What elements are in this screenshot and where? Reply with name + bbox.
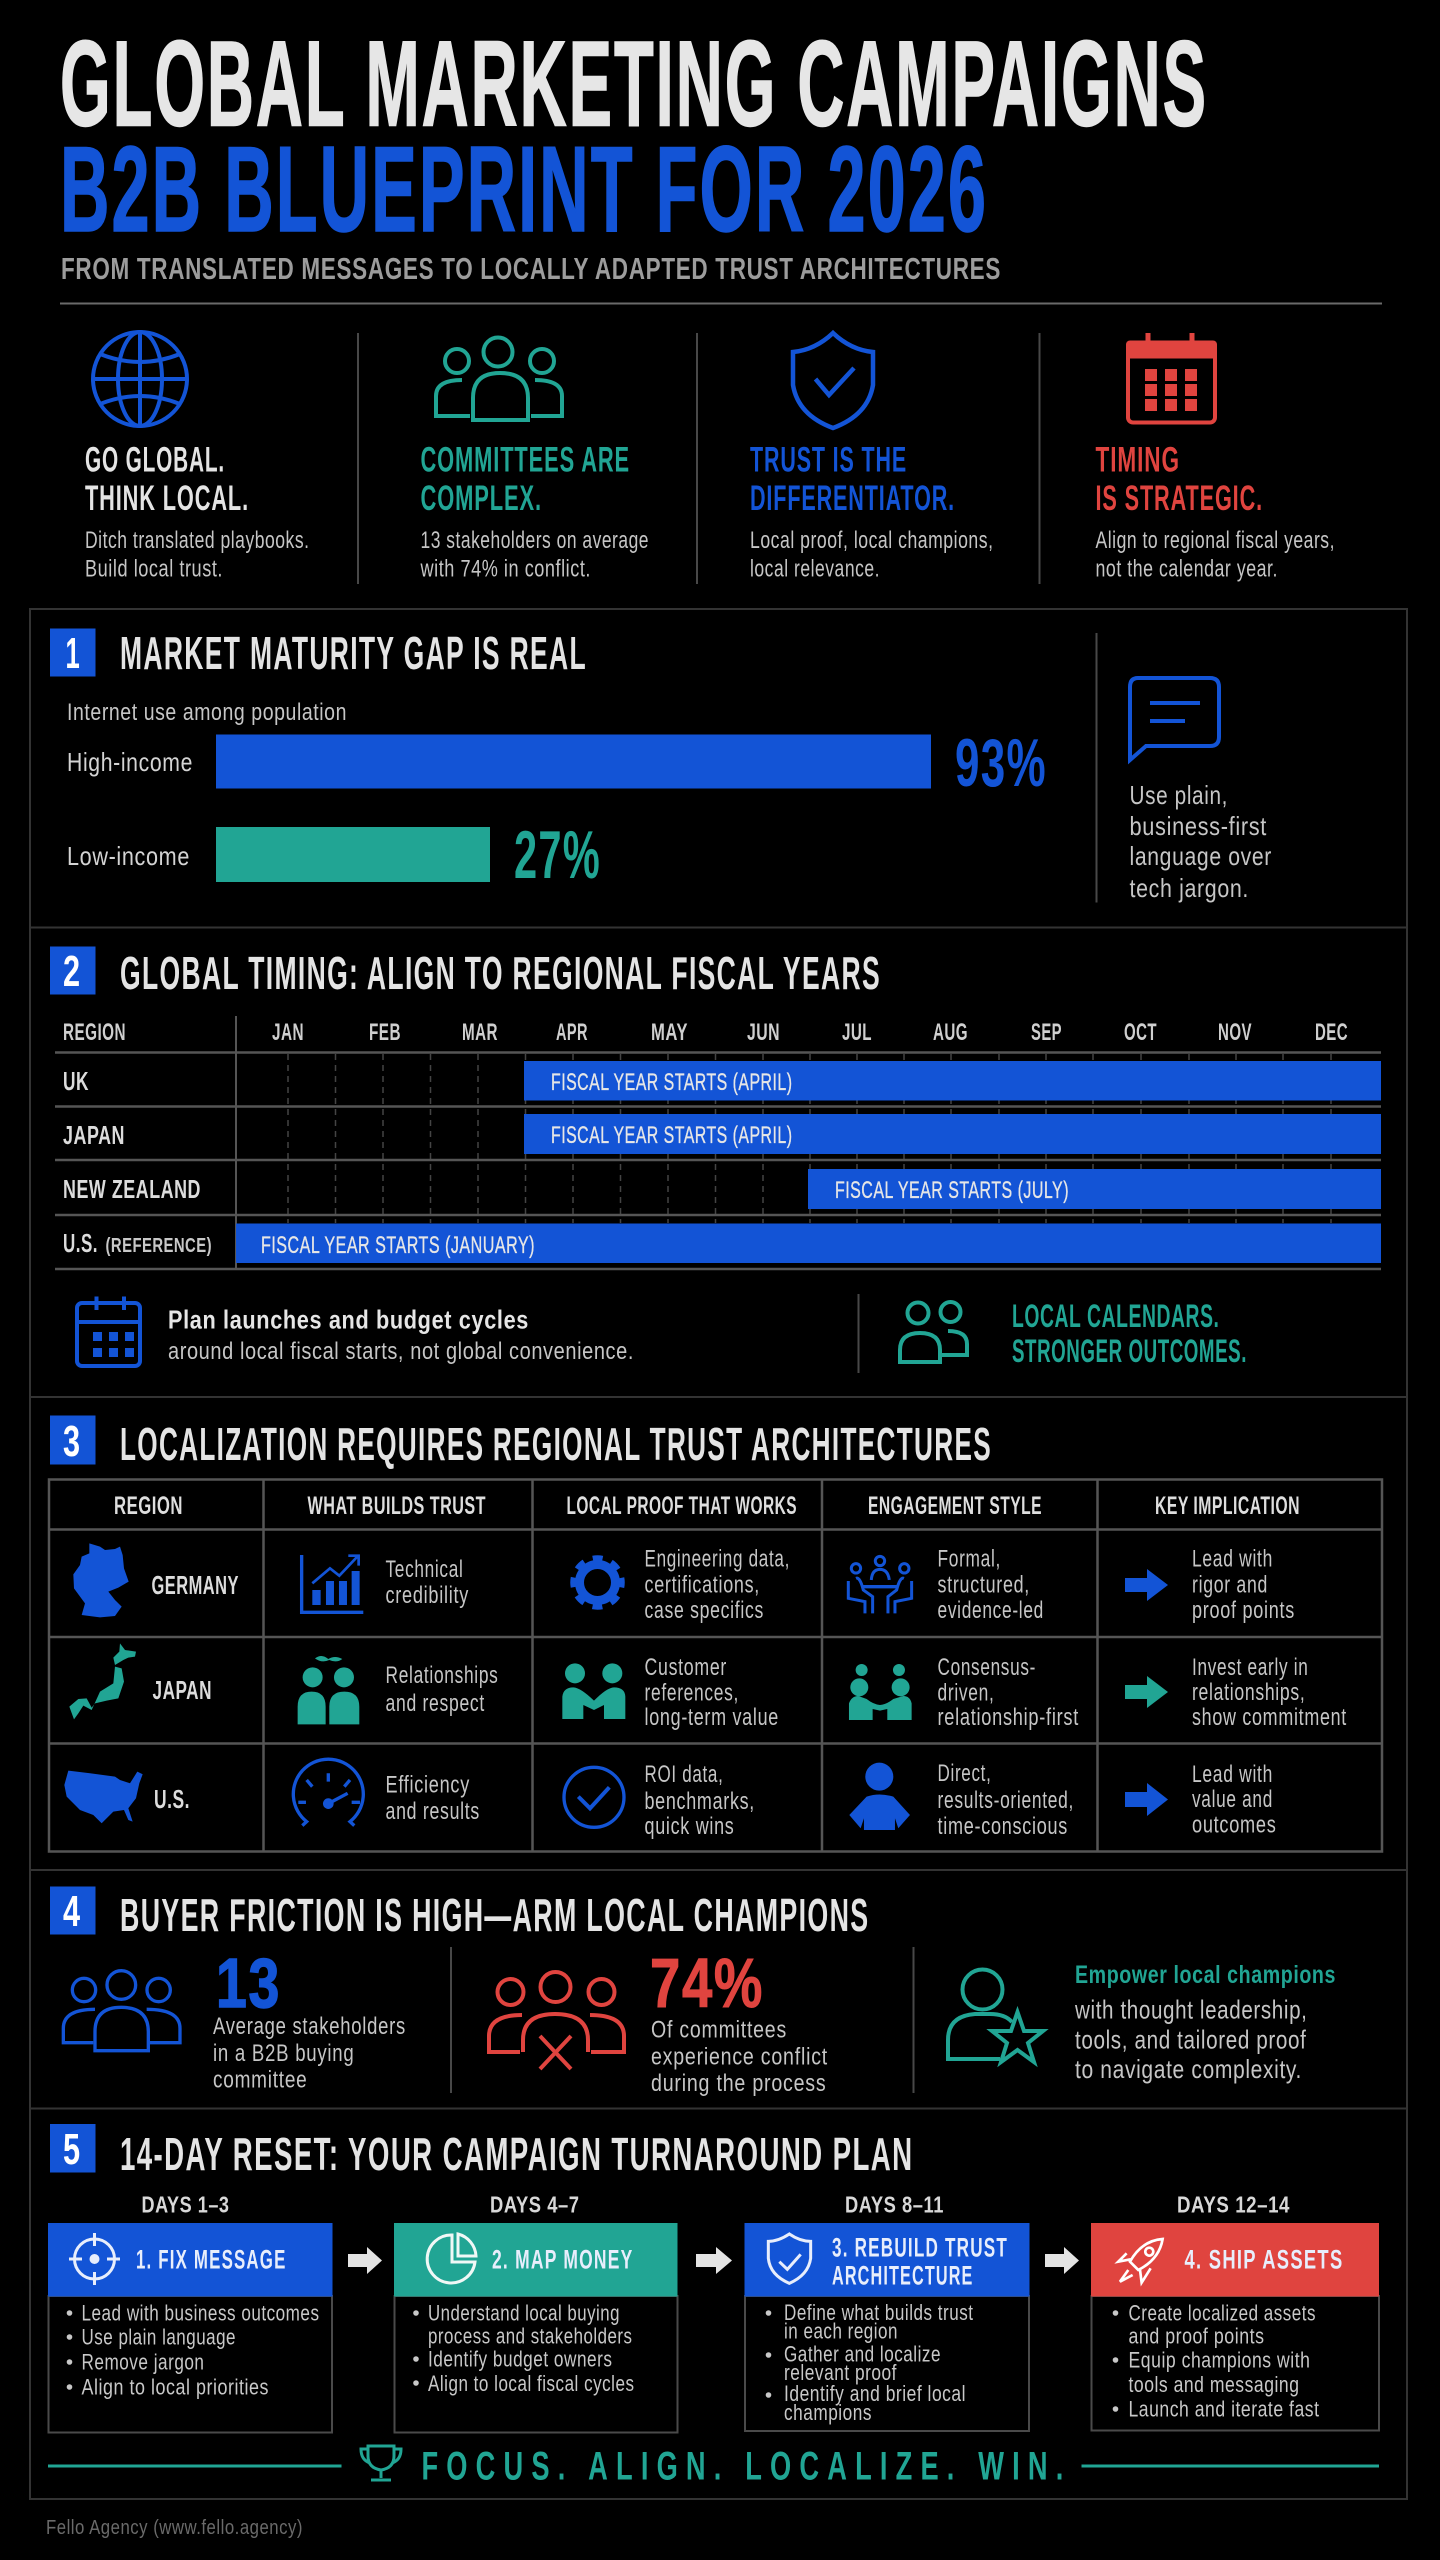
arrow	[1125, 1676, 1168, 1708]
panel: timing	[1096, 333, 1335, 582]
bullet list: and proof points	[1128, 2324, 1264, 2348]
bullet list	[67, 2300, 320, 2400]
section badge 2: 2	[63, 947, 81, 996]
bullet list: process and stakeholders	[428, 2324, 632, 2348]
row: U.S.: ROI data,	[644, 1761, 724, 1788]
row: Japan	[69, 1643, 1347, 1731]
stat: 13 stakeholders: in a B2B buying	[213, 2040, 354, 2067]
callout: plain language: language over	[1130, 841, 1272, 871]
panel: committees: COMPLEX.	[420, 479, 542, 518]
row: U.S.: time-conscious	[938, 1813, 1068, 1840]
panel: trust: local relevance.	[750, 556, 880, 582]
row: U.S.: Direct,	[938, 1760, 992, 1787]
icon: shield	[793, 333, 873, 428]
panel: timing: Align to regional fiscal years,	[1096, 527, 1335, 554]
callout: plain language: tech jargon.	[1130, 873, 1249, 903]
step 4: ship assets	[1091, 2192, 1379, 2430]
row: Germany: Formal,	[938, 1546, 1001, 1572]
bar chart: internet use: 27%	[514, 817, 601, 893]
section badge 4	[50, 1886, 96, 1936]
icon: committee conflict	[489, 1972, 624, 2069]
row: U.S.: Lead with	[1192, 1761, 1273, 1788]
panel: go global: Ditch translated playbooks.	[85, 527, 310, 554]
month header: APR	[556, 1019, 588, 1046]
row: Germany: case specifics	[644, 1597, 764, 1624]
month header: JUL	[842, 1019, 872, 1046]
icon: trophy	[361, 2446, 401, 2480]
text: plan launches: around local fiscal starts, not global convenience.	[168, 1338, 634, 1365]
subtitle: FROM TRANSLATED MESSAGES TO LOCALLY ADAPTED TRUST ARCHITECTURES	[61, 251, 1001, 286]
bullet list: Equip champions with	[1128, 2348, 1310, 2372]
row: Germany: certifications,	[644, 1572, 760, 1598]
bullet list: champions	[784, 2400, 872, 2425]
bullet list	[1113, 2300, 1320, 2422]
icon: calendar	[1126, 333, 1217, 422]
arrow	[1125, 1783, 1168, 1816]
month header: JUN	[747, 1019, 780, 1046]
row UK: UK	[63, 1066, 89, 1096]
row: Germany: GERMANY	[152, 1570, 239, 1600]
section badge 3	[50, 1416, 96, 1466]
row: U.S.: benchmarks,	[644, 1788, 755, 1815]
row UK	[63, 1061, 1381, 1100]
table header: ENGAGEMENT STYLE	[868, 1492, 1042, 1520]
row: Japan: Relationships	[386, 1662, 498, 1689]
title block	[60, 16, 1208, 257]
section badge 2	[50, 946, 96, 996]
step 3: rebuild trust	[744, 2192, 1030, 2431]
step 3: rebuild trust: ARCHITECTURE	[832, 2260, 974, 2290]
month header: AUG	[933, 1019, 968, 1046]
closing banner: FOCUS. ALIGN. LOCALIZE. WIN.	[422, 2444, 1072, 2488]
icon: committee	[436, 338, 562, 420]
heading: GLOBAL TIMING: ALIGN TO REGIONAL FISCAL YEARS	[120, 947, 881, 999]
row: U.S.: results-oriented,	[938, 1787, 1074, 1814]
icon: rocket	[1118, 2239, 1163, 2283]
icon: relationships	[298, 1656, 359, 1724]
bar chart: internet use: Internet use among population	[67, 699, 347, 726]
icon: bar chart	[302, 1555, 363, 1612]
panel: go global	[85, 332, 310, 582]
row: Germany: rigor and	[1192, 1572, 1268, 1598]
step 1: fix message: DAYS 1–3	[142, 2192, 230, 2218]
timeline chart	[55, 1016, 1381, 1269]
panel: go global: GO GLOBAL.	[85, 440, 225, 480]
row: Japan: and respect	[386, 1690, 485, 1717]
icon: speech bubble	[1130, 678, 1219, 760]
callout: local champions	[948, 1961, 1336, 2084]
panel: committees: COMMITTEES ARE	[420, 440, 630, 480]
panel: timing: not the calendar year.	[1096, 556, 1278, 582]
stat: 74% conflict: experience conflict	[651, 2044, 828, 2070]
row: Germany	[73, 1543, 1295, 1624]
bullet list: Gather and localize	[784, 2342, 941, 2366]
row: Japan: driven,	[938, 1680, 994, 1706]
stat: 74% conflict: Of committees	[651, 2016, 787, 2044]
row UK: FISCAL YEAR STARTS (APRIL)	[551, 1069, 792, 1096]
bullet list: Align to local fiscal cycles	[428, 2371, 634, 2396]
row: Japan: Consensus-	[938, 1654, 1036, 1681]
stat: 74% conflict: during the process	[651, 2070, 826, 2097]
stat: 74% conflict	[489, 1944, 828, 2097]
icon: target	[69, 2233, 120, 2285]
row U.S.	[63, 1224, 1381, 1263]
table header	[114, 1492, 1300, 1520]
bullet list	[766, 2300, 974, 2425]
bullet list: Remove jargon	[82, 2350, 204, 2374]
row: Japan: references,	[644, 1680, 739, 1706]
heading: MARKET MATURITY GAP IS REAL	[120, 627, 587, 679]
section badge 1: 1	[66, 629, 80, 678]
bullet list	[413, 2300, 634, 2396]
row: Germany: proof points	[1192, 1597, 1295, 1624]
section badge 4: 4	[63, 1887, 81, 1936]
icon: US map	[64, 1771, 143, 1823]
panel: trust	[750, 333, 994, 582]
row New Zealand	[63, 1169, 1381, 1209]
section badge 1	[50, 628, 96, 678]
panel: section 5 14-day reset	[48, 2124, 1379, 2488]
row: Japan: show commitment	[1192, 1704, 1347, 1731]
table header: KEY IMPLICATION	[1155, 1492, 1300, 1520]
text: local calendars	[1012, 1298, 1247, 1369]
row: U.S.: U.S.	[154, 1784, 190, 1814]
arrow	[1045, 2247, 1079, 2274]
icon: shield check	[768, 2234, 811, 2283]
panel: committees	[420, 338, 649, 582]
row: Germany: Technical	[386, 1556, 464, 1583]
callout: local champions: tools, and tailored proof	[1075, 2024, 1306, 2054]
panel: trust: TRUST IS THE	[750, 440, 907, 480]
step 1: fix message: 1. FIX MESSAGE	[136, 2244, 286, 2274]
step 3: rebuild trust: 3. REBUILD TRUST	[832, 2232, 1008, 2262]
row: U.S.	[64, 1759, 1276, 1840]
panel: section 1 market maturity	[50, 627, 1272, 903]
bar chart: internet use: Low-income	[67, 841, 190, 871]
bullet list: Identify budget owners	[428, 2346, 612, 2372]
icon: committee	[63, 1971, 180, 2051]
row New Zealand: FISCAL YEAR STARTS (JULY)	[835, 1177, 1069, 1204]
bullet list: Create localized assets	[1128, 2300, 1316, 2326]
month header: JAN	[272, 1019, 304, 1046]
bullet list: Identify and brief local	[784, 2381, 966, 2406]
step 2: map money: 2. MAP MONEY	[492, 2244, 634, 2274]
panel: timing: TIMING	[1096, 440, 1180, 480]
section badge 3: 3	[63, 1417, 81, 1466]
table header: WHAT BUILDS TRUST	[308, 1492, 486, 1520]
text: plan launches: Plan launches and budget cycles	[168, 1304, 529, 1334]
month header: SEP	[1031, 1019, 1062, 1046]
icon: Germany map	[73, 1543, 129, 1617]
row: Japan: long-term value	[644, 1704, 779, 1731]
panel: timing: IS STRATEGIC.	[1096, 479, 1263, 518]
callout: plain language	[1130, 780, 1272, 903]
stat: 13 stakeholders: committee	[213, 2066, 308, 2094]
step 2: map money	[394, 2192, 678, 2432]
table header: LOCAL PROOF THAT WORKS	[566, 1492, 797, 1520]
row: Germany: Lead with	[1192, 1546, 1273, 1572]
panel: trust: DIFFERENTIATOR.	[750, 479, 955, 518]
section badge 5: 5	[63, 2125, 81, 2174]
icon: gauge	[293, 1759, 363, 1826]
row: U.S.: Efficiency	[386, 1772, 470, 1798]
table: trust architectures	[49, 1480, 1382, 1852]
icon: meeting	[848, 1556, 912, 1613]
step 1: fix message	[48, 2192, 332, 2432]
panel: trust: Local proof, local champions,	[750, 527, 994, 554]
icon: person	[849, 1763, 910, 1830]
bullet list: tools and messaging	[1128, 2372, 1300, 2397]
bullet list: Align to local priorities	[82, 2374, 269, 2400]
row U.S.: (REFERENCE)	[106, 1235, 212, 1257]
stat: 13 stakeholders	[63, 1944, 406, 2094]
month header: MAR	[462, 1019, 498, 1046]
bullet list: Lead with business outcomes	[82, 2300, 320, 2326]
row: U.S.: quick wins	[644, 1813, 734, 1840]
icon: gear	[574, 1559, 621, 1606]
step 4: ship assets: DAYS 12–14	[1177, 2192, 1290, 2218]
icon: handshake	[562, 1663, 625, 1719]
row: U.S.: and results	[386, 1798, 480, 1825]
row: Japan: JAPAN	[152, 1675, 212, 1705]
panel: committees: 13 stakeholders on average	[420, 527, 649, 554]
bar chart: internet use	[67, 699, 1047, 893]
arrow	[348, 2247, 382, 2274]
stat: 13 stakeholders: Average stakeholders	[213, 2013, 406, 2040]
panel: committees: with 74% in conflict.	[420, 556, 591, 582]
text: local calendars: LOCAL CALENDARS.	[1012, 1298, 1220, 1334]
bar chart: internet use: 93%	[955, 725, 1047, 801]
arrow	[1125, 1569, 1168, 1601]
row Japan: FISCAL YEAR STARTS (APRIL)	[551, 1122, 792, 1149]
bullet list: Define what builds trust	[784, 2300, 974, 2325]
heading: BUYER FRICTION IS HIGH—ARM LOCAL CHAMPIONS	[120, 1889, 870, 1941]
month header: OCT	[1124, 1019, 1157, 1046]
month header	[63, 1019, 1348, 1046]
icon: two people	[900, 1302, 967, 1362]
stat: 13 stakeholders: 13	[216, 1944, 281, 2022]
icon: consensus	[849, 1664, 912, 1720]
table header: REGION	[114, 1492, 183, 1520]
text: local calendars: STRONGER OUTCOMES.	[1012, 1333, 1247, 1369]
callout: plain language: Use plain,	[1130, 780, 1228, 810]
icon: blue calendar	[77, 1296, 140, 1366]
callout: local champions: with thought leadership,	[1074, 1994, 1308, 2024]
row Japan	[63, 1114, 1381, 1154]
panel: go global: THINK LOCAL.	[85, 479, 249, 518]
month header: REGION	[63, 1019, 126, 1046]
icon: Japan map	[69, 1643, 136, 1719]
heading: 14-DAY RESET: YOUR CAMPAIGN TURNAROUND PLAN	[120, 2128, 914, 2180]
panel: go global: Build local trust.	[85, 556, 223, 582]
step 4: ship assets: 4. SHIP ASSETS	[1184, 2244, 1344, 2274]
row: Germany: credibility	[386, 1582, 469, 1609]
bullet list: Understand local buying	[428, 2300, 620, 2326]
row: Japan: relationships,	[1192, 1679, 1306, 1706]
icon: person with star	[948, 1970, 1043, 2062]
row: Germany: Engineering data,	[644, 1546, 790, 1572]
callout: plain language: business-first	[1130, 811, 1267, 841]
bullet list: in each region	[784, 2318, 898, 2344]
row U.S.: FISCAL YEAR STARTS (JANUARY)	[261, 1232, 535, 1259]
row: Germany: structured,	[938, 1572, 1030, 1598]
row New Zealand: NEW ZEALAND	[63, 1174, 201, 1204]
footer source: Fello Agency (www.fello.agency)	[46, 2517, 303, 2539]
panel: section 2 global timing	[50, 946, 1381, 1373]
panel: section 4 buyer friction	[50, 1886, 1336, 2097]
row: U.S.: outcomes	[1192, 1812, 1276, 1838]
row: U.S.: value and	[1192, 1786, 1273, 1813]
row: Japan: Invest early in	[1192, 1654, 1308, 1681]
icon: pie chart	[427, 2234, 476, 2283]
text: plan launches	[168, 1304, 634, 1365]
month header: FEB	[369, 1019, 401, 1046]
bullet list: Launch and iterate fast	[1128, 2396, 1320, 2422]
month header: DEC	[1315, 1019, 1348, 1046]
panel: section 3 localization	[49, 1416, 1382, 1852]
month header: MAY	[651, 1019, 688, 1046]
row Japan: JAPAN	[63, 1120, 125, 1150]
row: Germany: evidence-led	[938, 1597, 1044, 1624]
row: Japan: relationship-first	[938, 1704, 1079, 1731]
month header: NOV	[1218, 1019, 1252, 1046]
stat: 74% conflict: 74%	[650, 1944, 764, 2022]
bullet list: Use plain language	[82, 2324, 236, 2350]
row: Japan: Customer	[644, 1654, 727, 1681]
step 2: map money: DAYS 4–7	[490, 2192, 580, 2218]
bar chart: internet use: High-income	[67, 747, 193, 777]
icon: globe	[93, 332, 187, 426]
bullet list: relevant proof	[784, 2360, 897, 2385]
callout: local champions: to navigate complexity.	[1075, 2054, 1302, 2084]
step 3: rebuild trust: DAYS 8–11	[845, 2192, 944, 2218]
row U.S.: U.S.	[63, 1228, 98, 1258]
section badge 5	[50, 2124, 96, 2174]
arrow	[696, 2247, 732, 2274]
callout: local champions: Empower local champions	[1075, 1961, 1336, 1989]
icon: check circle	[564, 1767, 624, 1827]
